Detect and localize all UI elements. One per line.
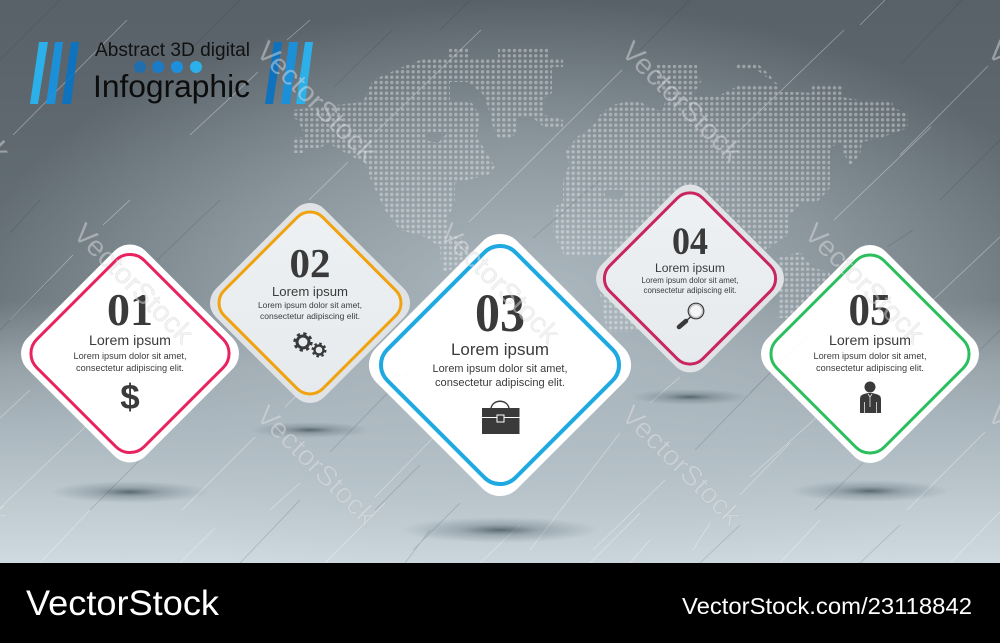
icon: gears — [295, 334, 325, 356]
heading 02: Lorem ipsum — [272, 284, 348, 299]
heading 03: Lorem ipsum — [451, 340, 549, 359]
map: Americas — [292, 48, 563, 273]
logo: right blue bars — [265, 42, 313, 104]
body text 03: consectetur adipiscing elit. — [435, 377, 565, 389]
map: Australia — [777, 252, 830, 318]
watermarks: VectorStock — [434, 217, 566, 350]
heading 05: Lorem ipsum — [829, 333, 911, 349]
title: Infographic: Infographic — [93, 68, 250, 104]
body text 03: Lorem ipsum dolor sit amet, — [432, 363, 568, 375]
body text 02: consectetur adipiscing elit. — [260, 311, 360, 321]
footer bar — [0, 563, 1000, 643]
body text 02: Lorem ipsum dolor sit amet, — [258, 300, 362, 310]
icon: businessman — [860, 382, 881, 413]
panel: card 03 — [359, 224, 641, 506]
number 02: 02 — [290, 240, 330, 286]
watermarks — [0, 35, 1000, 532]
map: Eurasia and Africa — [553, 63, 908, 332]
footer image id: VectorStock.com/23118842 — [682, 593, 972, 619]
heading 01: Lorem ipsum — [89, 333, 171, 349]
watermarks: VectorStock — [799, 217, 931, 350]
logo: left blue bars — [30, 42, 79, 104]
body text 04: consectetur adipiscing elit. — [644, 286, 736, 295]
floor shadows — [50, 389, 950, 543]
watermarks: VectorStock — [68, 217, 200, 350]
body text 03 — [432, 363, 568, 389]
body text 04 — [642, 276, 738, 295]
number 03: 03 — [475, 283, 525, 343]
icon: magnifier — [679, 303, 704, 327]
number 01: 01 — [107, 284, 153, 335]
body text 02 — [258, 300, 362, 321]
title: Abstract 3D digital: Abstract 3D digital — [95, 40, 250, 61]
body text 05: Lorem ipsum dolor sit amet, — [814, 351, 926, 361]
footer brand: VectorStock — [26, 584, 220, 623]
body text 05 — [814, 351, 926, 373]
heading 04: Lorem ipsum — [655, 261, 725, 275]
body text 04: Lorem ipsum dolor sit amet, — [642, 276, 738, 285]
number 05: 05 — [848, 284, 892, 335]
body text 05: consectetur adipiscing elit. — [816, 363, 924, 373]
number 04: 04 — [672, 220, 708, 263]
title dots — [134, 61, 202, 73]
dotted world map — [292, 48, 908, 332]
icon: dollar: $ — [120, 378, 140, 417]
panel: card 04 — [588, 176, 792, 381]
body text 01: Lorem ipsum dolor sit amet, — [74, 351, 186, 361]
watermarks: VectorStock — [616, 35, 748, 168]
panel: card 02 — [202, 195, 418, 411]
watermarks: VectorStock — [616, 399, 748, 532]
watermarks: VectorStock — [251, 35, 383, 168]
panel: card 05 — [752, 236, 988, 472]
panel: card 01 — [12, 235, 248, 472]
icon: briefcase — [482, 401, 520, 434]
body text 01: consectetur adipiscing elit. — [76, 363, 184, 373]
watermarks: VectorStock — [251, 399, 383, 532]
body text 01 — [74, 351, 186, 373]
